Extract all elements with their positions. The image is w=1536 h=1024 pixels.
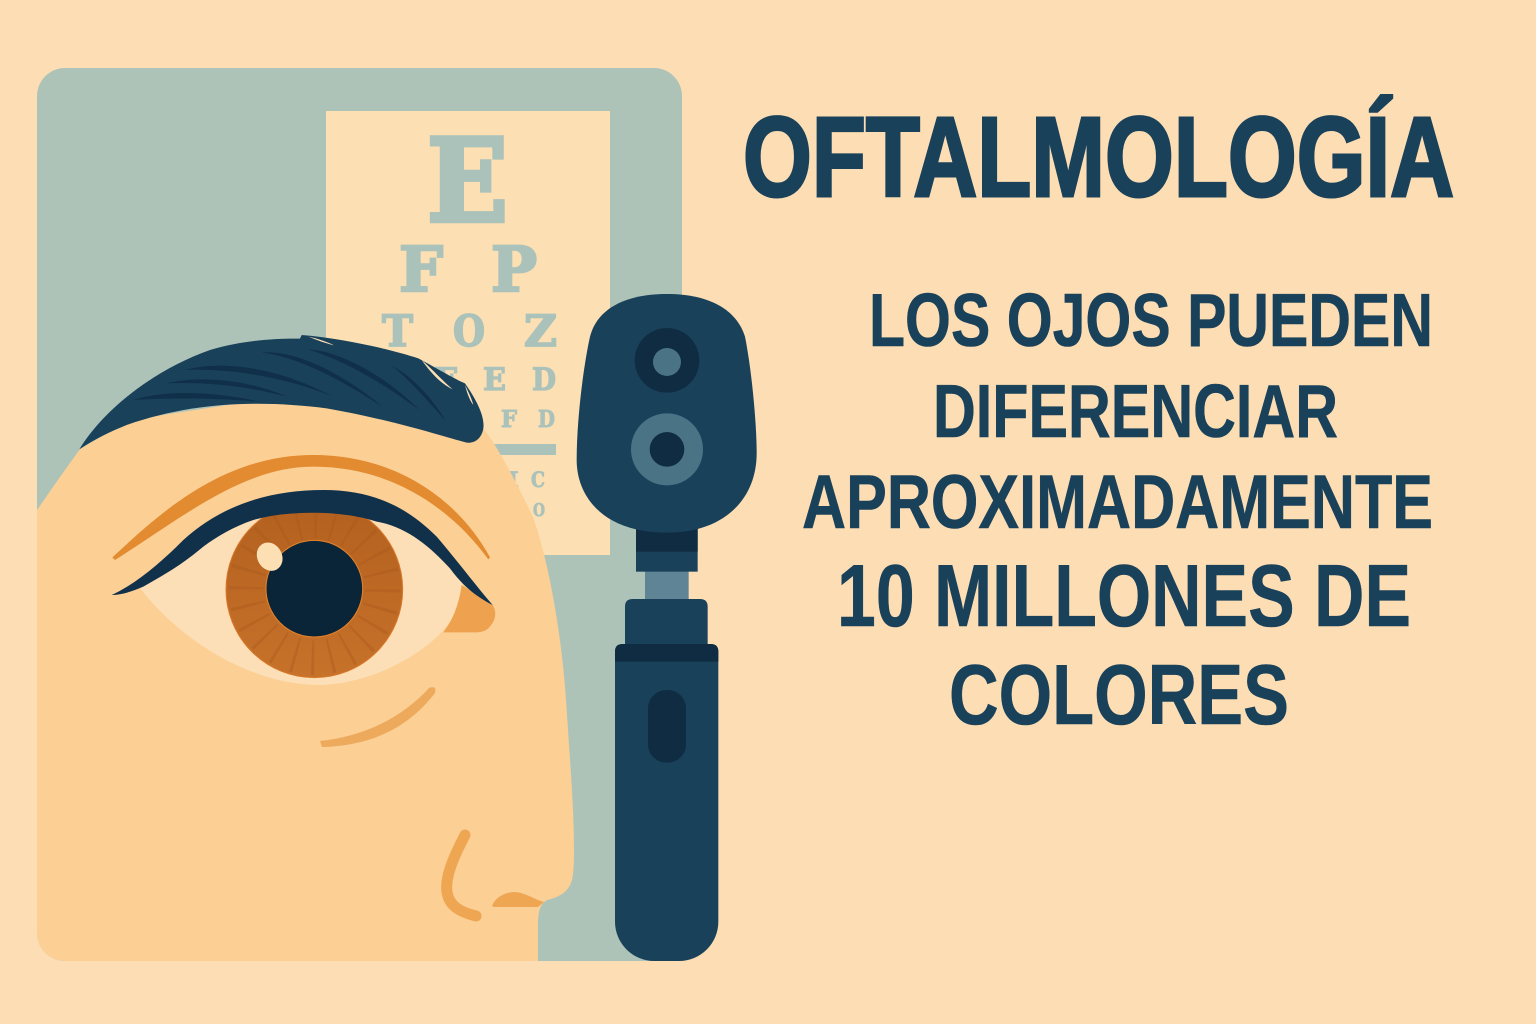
chart row 6 bbox=[505, 467, 545, 492]
under-eye crease bbox=[320, 687, 435, 747]
chart row 4 bbox=[434, 362, 556, 398]
chart row 3: O bbox=[453, 307, 485, 357]
chart row 1: E bbox=[427, 114, 508, 248]
chart row 5 bbox=[501, 406, 555, 433]
chart row 5: F bbox=[501, 406, 518, 433]
eye chart bbox=[326, 111, 610, 555]
handle dark band bbox=[615, 644, 718, 662]
handle slot bbox=[648, 690, 686, 763]
tear duct corner bbox=[443, 585, 495, 632]
ophthalmoscope bbox=[577, 294, 757, 961]
chart row 6: I bbox=[505, 467, 519, 492]
eyebrow bbox=[79, 335, 484, 449]
face profile bbox=[37, 400, 574, 961]
nostril bbox=[492, 892, 544, 907]
main statement text: DIFERENCIAR bbox=[933, 369, 1338, 453]
chart row 4: E bbox=[483, 362, 506, 398]
chart row 6: C bbox=[531, 467, 545, 492]
eyebrow hair strokes bbox=[133, 349, 446, 421]
chart row 4: D bbox=[532, 362, 556, 398]
chart row 3: Z bbox=[524, 307, 557, 357]
chart row 2: F bbox=[399, 233, 443, 306]
eyebrow light slits bbox=[308, 337, 473, 405]
lower lens bbox=[631, 413, 703, 485]
iris bbox=[226, 501, 403, 678]
chart row 2: P bbox=[491, 233, 537, 306]
sclera bbox=[137, 507, 463, 685]
chart row 3: T bbox=[382, 307, 413, 357]
chart row 7: O bbox=[533, 500, 545, 521]
chart row 5: D bbox=[538, 406, 555, 433]
eye bbox=[112, 455, 495, 685]
scope head bbox=[577, 294, 757, 533]
chart divider bar bbox=[480, 444, 556, 455]
panel: teal illustration backdrop bbox=[37, 68, 682, 961]
upper lens bbox=[635, 328, 699, 393]
pupil bbox=[266, 540, 363, 637]
upper eyelid line bbox=[112, 490, 493, 605]
scope neck bbox=[636, 528, 698, 572]
eyelid crease bbox=[112, 455, 490, 560]
scope collar bbox=[625, 599, 708, 647]
chart row 4: F bbox=[434, 362, 457, 398]
scope connector bbox=[645, 570, 689, 602]
main statement text bbox=[802, 278, 1433, 743]
main statement text: COLORES bbox=[949, 648, 1289, 743]
nose wing line bbox=[447, 835, 476, 916]
eye highlight bbox=[252, 538, 287, 575]
chart row 2 bbox=[399, 233, 537, 306]
scope handle bbox=[615, 644, 718, 961]
chart row 3 bbox=[382, 307, 557, 357]
